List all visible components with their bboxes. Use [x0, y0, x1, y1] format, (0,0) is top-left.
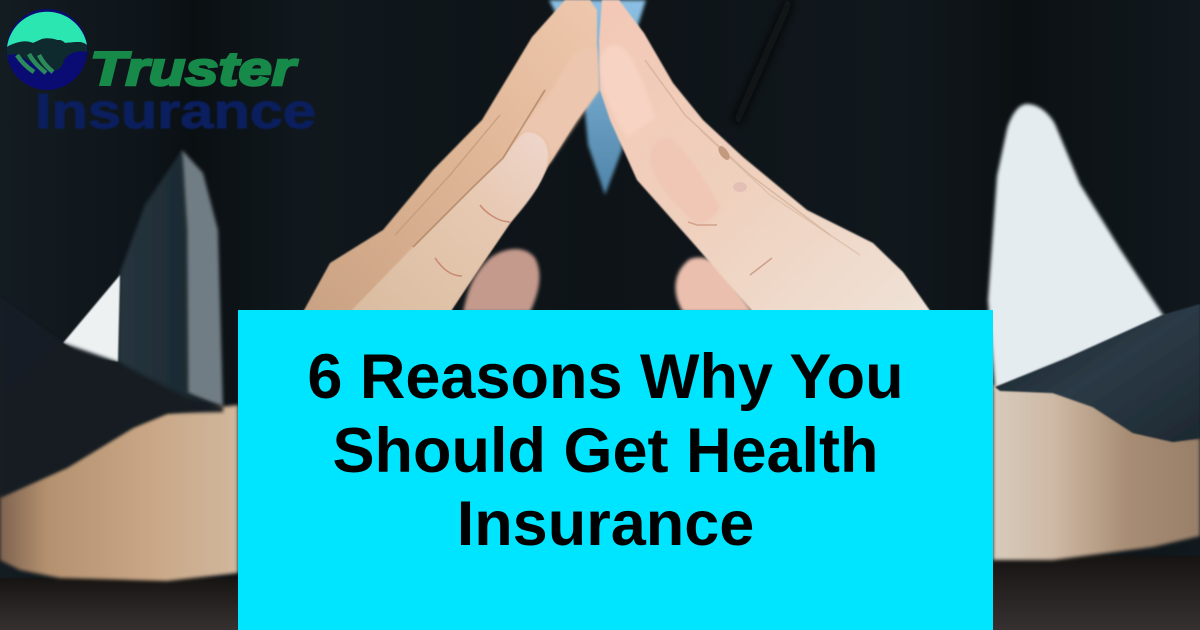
right hand thumb	[650, 138, 720, 225]
title panel	[238, 310, 993, 630]
logo emblem	[6, 9, 88, 90]
left hand upper fingers	[515, 47, 599, 165]
right hand index finger	[600, 45, 655, 138]
right hand	[599, 0, 931, 312]
title	[307, 342, 904, 559]
left white background gap	[63, 275, 120, 362]
logo: Truster Insurance	[6, 9, 316, 139]
lapel line	[736, 0, 790, 123]
title: Insurance	[457, 489, 754, 559]
left sleeve	[0, 297, 223, 497]
right sleeve	[995, 304, 1200, 442]
logo word: Truster: Truster	[90, 42, 298, 95]
dark suit panel	[118, 150, 223, 407]
table	[0, 556, 1200, 630]
right forearm	[993, 385, 1200, 560]
left hand thumb	[350, 132, 548, 312]
title: 6 Reasons Why You	[307, 342, 904, 412]
left hand finger lines	[395, 90, 545, 276]
title: Should Get Health	[332, 416, 879, 486]
logo word: Insurance: Insurance	[35, 85, 316, 139]
folded lower fingers	[463, 249, 753, 312]
right white background gap	[988, 104, 1165, 390]
light shirt strip	[182, 150, 223, 407]
left hand	[303, 0, 599, 312]
left forearm	[0, 405, 238, 581]
right hand finger lines	[645, 60, 860, 275]
tie	[549, 0, 646, 195]
